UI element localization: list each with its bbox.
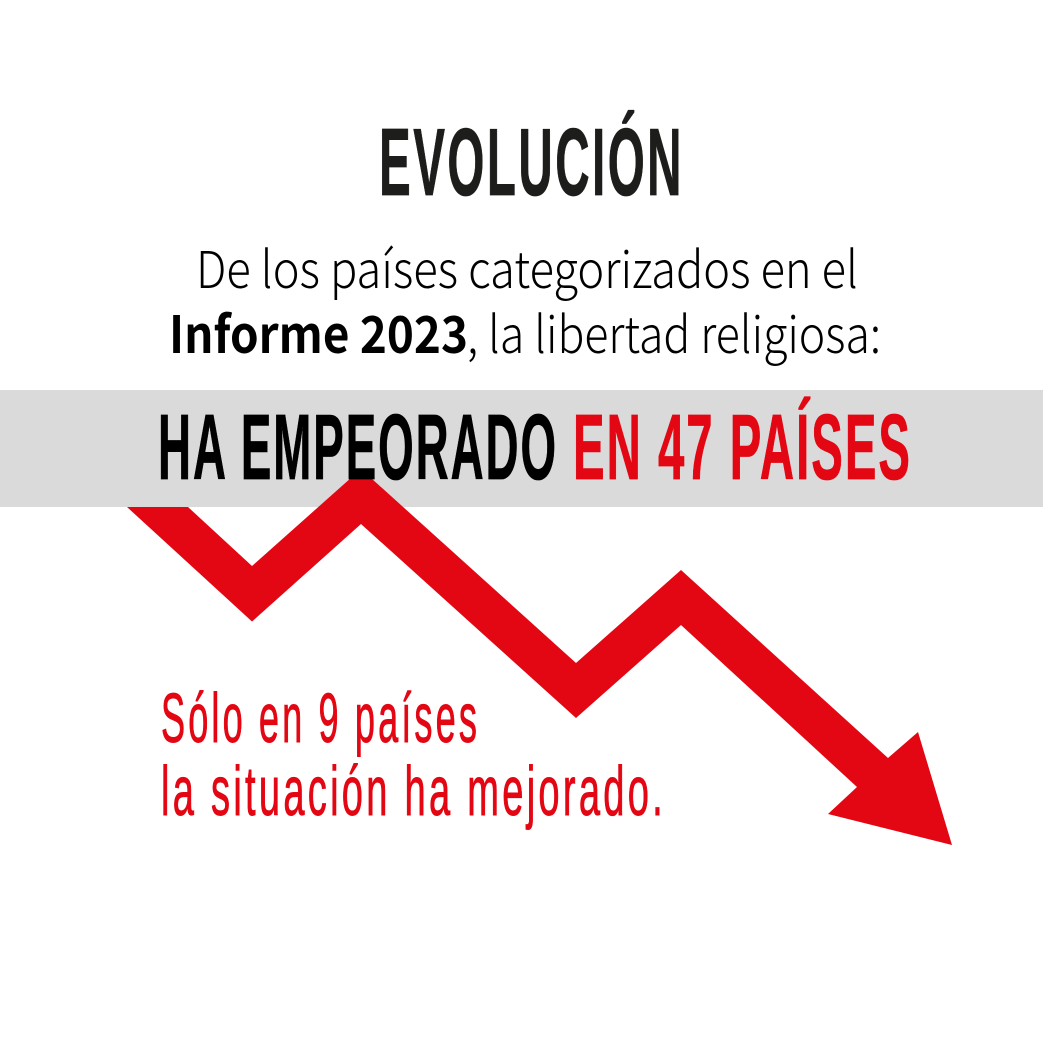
intro line 2 bold: Informe 2023 <box>169 294 468 368</box>
grey band <box>0 390 1043 507</box>
intro text block <box>169 229 881 368</box>
intro line 1: De los países categorizados en el <box>196 229 858 303</box>
red downward arrow <box>127 469 952 845</box>
intro line 2 light: , la libertad religiosa: <box>467 294 881 368</box>
band headline: HA EMPEORADO <box>158 395 558 499</box>
text: EVOLUCIÓN <box>379 109 684 216</box>
note line 1: Sólo en 9 países <box>161 679 480 757</box>
red note <box>161 679 666 830</box>
